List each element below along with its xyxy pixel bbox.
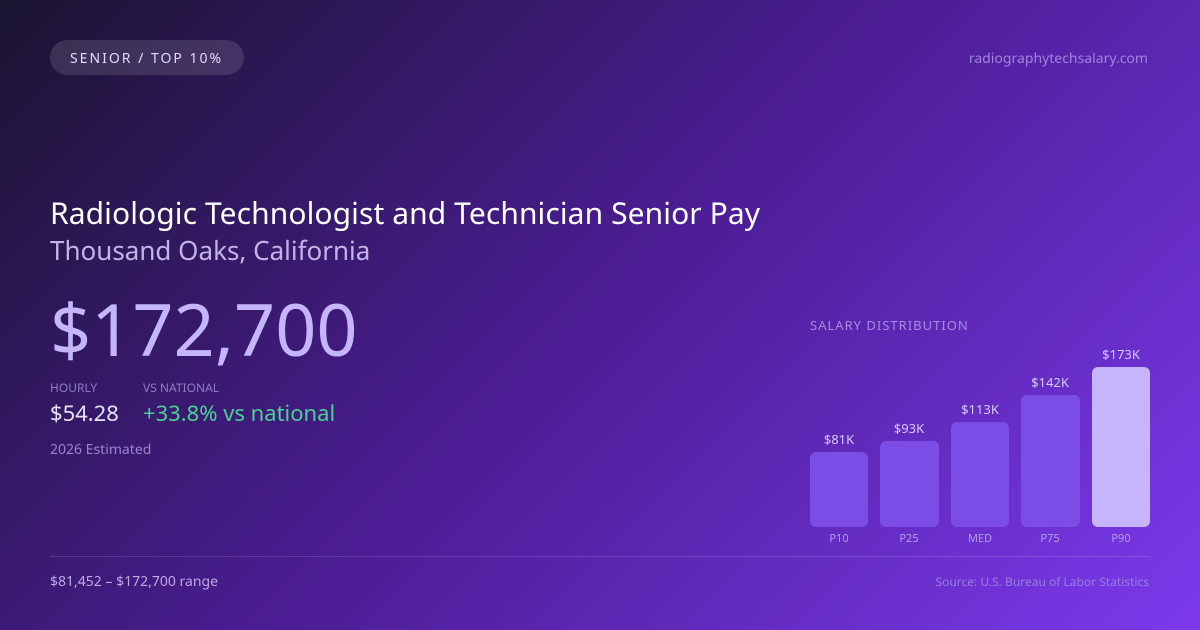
bar: median (951, 422, 1009, 527)
subtitle: location: Thousand Oaks, California (50, 232, 370, 268)
bar: P10 (810, 452, 868, 527)
vs national stat (143, 379, 335, 428)
value: median: $113K (961, 400, 999, 418)
bar: P75 (1021, 395, 1080, 527)
badge: senior / top 10% (50, 40, 244, 75)
bar chart: salary distribution (810, 316, 1150, 546)
badge: senior / top 10%: SENIOR / TOP 10% (70, 49, 223, 68)
axis label: P10: P10 (829, 531, 849, 546)
hourly value: $54.28 (50, 398, 119, 428)
axis label: median: MED (968, 531, 992, 546)
site name: radiographytechsalary.com (969, 49, 1148, 68)
chart heading: SALARY DISTRIBUTION (810, 316, 969, 334)
axis label: P75: P75 (1040, 531, 1060, 546)
axis label: P25: P25 (899, 531, 919, 546)
salary range: $81,452 – $172,700 range (50, 572, 218, 591)
vs national value: +33.8% vs national (143, 398, 335, 428)
hourly label: HOURLY (50, 379, 97, 396)
value: P90: $173K (1102, 345, 1140, 363)
source: Source: U.S. Bureau of Labor Statistics (936, 573, 1149, 590)
value: P10: $81K (824, 430, 854, 448)
vs national label: VS NATIONAL (143, 379, 219, 396)
hourly stat (50, 379, 119, 428)
title: Radiologic Technologist and Technician Senior Pay (50, 192, 760, 233)
bar: P25 (880, 441, 939, 527)
axis label: P90: P90 (1111, 531, 1131, 546)
bar: P90 (1092, 367, 1150, 527)
value: P75: $142K (1031, 373, 1069, 391)
estimate note: 2026 Estimated (50, 440, 151, 459)
headline salary: $172,700 (50, 280, 358, 378)
value: P25: $93K (894, 419, 924, 437)
